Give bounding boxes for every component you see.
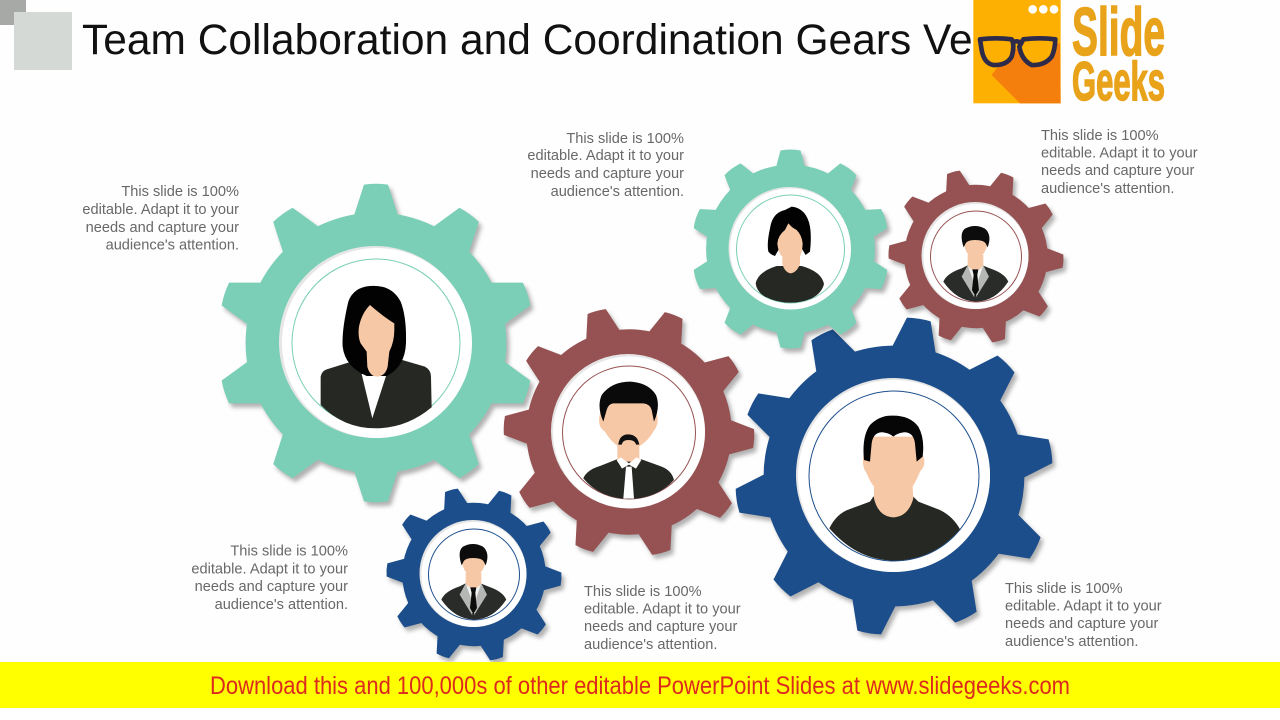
text block: top left: needs and capture your (86, 220, 239, 236)
banner: yellow download strip (0, 662, 1280, 708)
logo wordmark: Geeks (1072, 50, 1165, 112)
person: suited man (441, 544, 506, 620)
text block: top left: This slide is 100% (121, 184, 239, 200)
person: woman with short hair (756, 207, 824, 303)
text block: bottom right (1005, 581, 1162, 650)
text block: top left: audience's attention. (106, 238, 239, 254)
text block: top left (82, 184, 239, 254)
title: Team Collaboration and Coordination Gears Ve (82, 17, 973, 64)
text block: bottom center: This slide is 100% (584, 584, 702, 600)
text block: top right: editable. Adapt it to your (1041, 146, 1198, 162)
text block: top center: needs and capture your (531, 166, 684, 182)
text block: top center: editable. Adapt it to your (527, 148, 684, 164)
text block: bottom center: audience's attention. (584, 637, 717, 653)
text block: bottom left: This slide is 100% (230, 544, 348, 560)
gear: large navy with man (713, 294, 1075, 658)
text block: top center: audience's attention. (551, 184, 684, 200)
logo wordmark (1072, 0, 1165, 112)
logo: Slide Geeks (973, 0, 1165, 112)
person: suited man (943, 226, 1008, 302)
gear: large teal with woman (218, 184, 534, 502)
text block: top right: audience's attention. (1041, 181, 1174, 197)
text block: bottom right: audience's attention. (1005, 634, 1138, 650)
text block: bottom center: needs and capture your (584, 619, 737, 635)
corner decoration squares (0, 0, 72, 70)
text block: bottom left: needs and capture your (195, 579, 348, 595)
text block: bottom center: editable. Adapt it to your (584, 602, 741, 618)
logo icon: orange square with glasses (973, 0, 1061, 103)
text block: bottom center (584, 584, 741, 653)
text block: bottom right: editable. Adapt it to your (1005, 598, 1162, 614)
person: man in dark shirt (829, 416, 960, 561)
person: man with moustache (583, 382, 674, 499)
gear: small navy with suited man (361, 462, 587, 687)
text block: bottom left: editable. Adapt it to your (191, 562, 348, 578)
text block: top center (527, 131, 684, 200)
text block: bottom left (191, 544, 348, 613)
text block: bottom right: This slide is 100% (1005, 581, 1123, 597)
gear: center maroon with moustached man (468, 270, 790, 594)
banner text: Download this and 100,000s of other editable PowerPoint Slides at www.slidegeeks.com (210, 672, 1070, 700)
text block: top right: needs and capture your (1041, 163, 1194, 179)
gear: small maroon with suited man (863, 144, 1089, 369)
person: woman in blazer (321, 286, 432, 428)
text block: bottom left: audience's attention. (215, 597, 348, 613)
text block: top right: This slide is 100% (1041, 128, 1159, 144)
text block: top center: This slide is 100% (566, 131, 684, 147)
gear: small teal with woman (691, 150, 890, 348)
text block: bottom right: needs and capture your (1005, 616, 1158, 632)
text block: top right (1041, 128, 1198, 197)
text block: top left: editable. Adapt it to your (82, 202, 239, 218)
